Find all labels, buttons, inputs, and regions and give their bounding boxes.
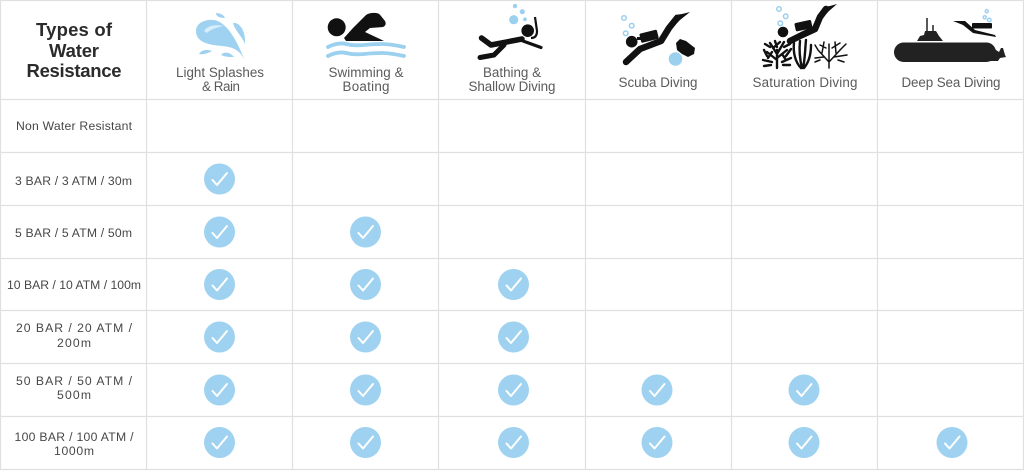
- column header: deep sea diving: [894, 10, 1006, 90]
- row label: non water resistant: Non Water Resistant: [16, 119, 133, 133]
- title: Types of: [36, 19, 113, 40]
- coral: [763, 40, 847, 68]
- row: 20 bar: 200m: [57, 336, 91, 350]
- icon: submarine and diver: [894, 10, 1006, 62]
- row: 10 bar: 10 BAR / 10 ATM / 100m: [7, 278, 141, 292]
- label: [468, 65, 556, 94]
- row: 20 bar: 20 BAR / 20 ATM /: [16, 321, 133, 335]
- column header: scuba diving: [618, 12, 698, 90]
- icon: snorkeler: [480, 4, 541, 58]
- row: 50 bar: 50 BAR / 50 ATM /: [16, 374, 133, 388]
- label: Boating: [342, 79, 390, 94]
- title: [26, 19, 122, 81]
- icon: diver above coral: [763, 4, 847, 68]
- label: [328, 65, 404, 94]
- row: 3 bar: 3 BAR / 3 ATM / 30m: [15, 174, 132, 188]
- label: Scuba Diving: [618, 75, 698, 90]
- icon: water splash: [196, 13, 245, 60]
- label: & Rain: [202, 79, 240, 94]
- column header: light splashes and rain: [176, 13, 264, 94]
- column header: swimming and boating: [328, 13, 404, 94]
- title: Water: [49, 40, 99, 61]
- column header: saturation diving: [752, 4, 858, 90]
- label: Light Splashes: [176, 65, 264, 80]
- label: Bathing &: [483, 65, 541, 80]
- row: 50 bar: 500m: [57, 388, 91, 402]
- row: 50 bar: [16, 374, 820, 406]
- row: 10 bar: [7, 269, 529, 300]
- row: 3 bar: [15, 164, 235, 194]
- label: [176, 65, 264, 94]
- label: Swimming &: [328, 65, 404, 80]
- label: Shallow Diving: [468, 79, 556, 94]
- row: 5 bar: 5 BAR / 5 ATM / 50m: [15, 226, 132, 240]
- title: Resistance: [26, 60, 122, 81]
- label: Deep Sea Diving: [902, 75, 1000, 90]
- row: 20 bar: [16, 321, 529, 352]
- row: 5 bar: [15, 216, 381, 248]
- row: 100 bar: 100 BAR / 100 ATM /: [14, 430, 134, 444]
- icon: scuba diver and fish: [622, 12, 695, 66]
- icon: swimmer: [328, 13, 404, 56]
- row: 100 bar: [14, 427, 968, 458]
- row: 100 bar: 1000m: [54, 444, 94, 458]
- label: Saturation Diving: [752, 75, 858, 90]
- column header: bathing and shallow diving: [468, 4, 556, 94]
